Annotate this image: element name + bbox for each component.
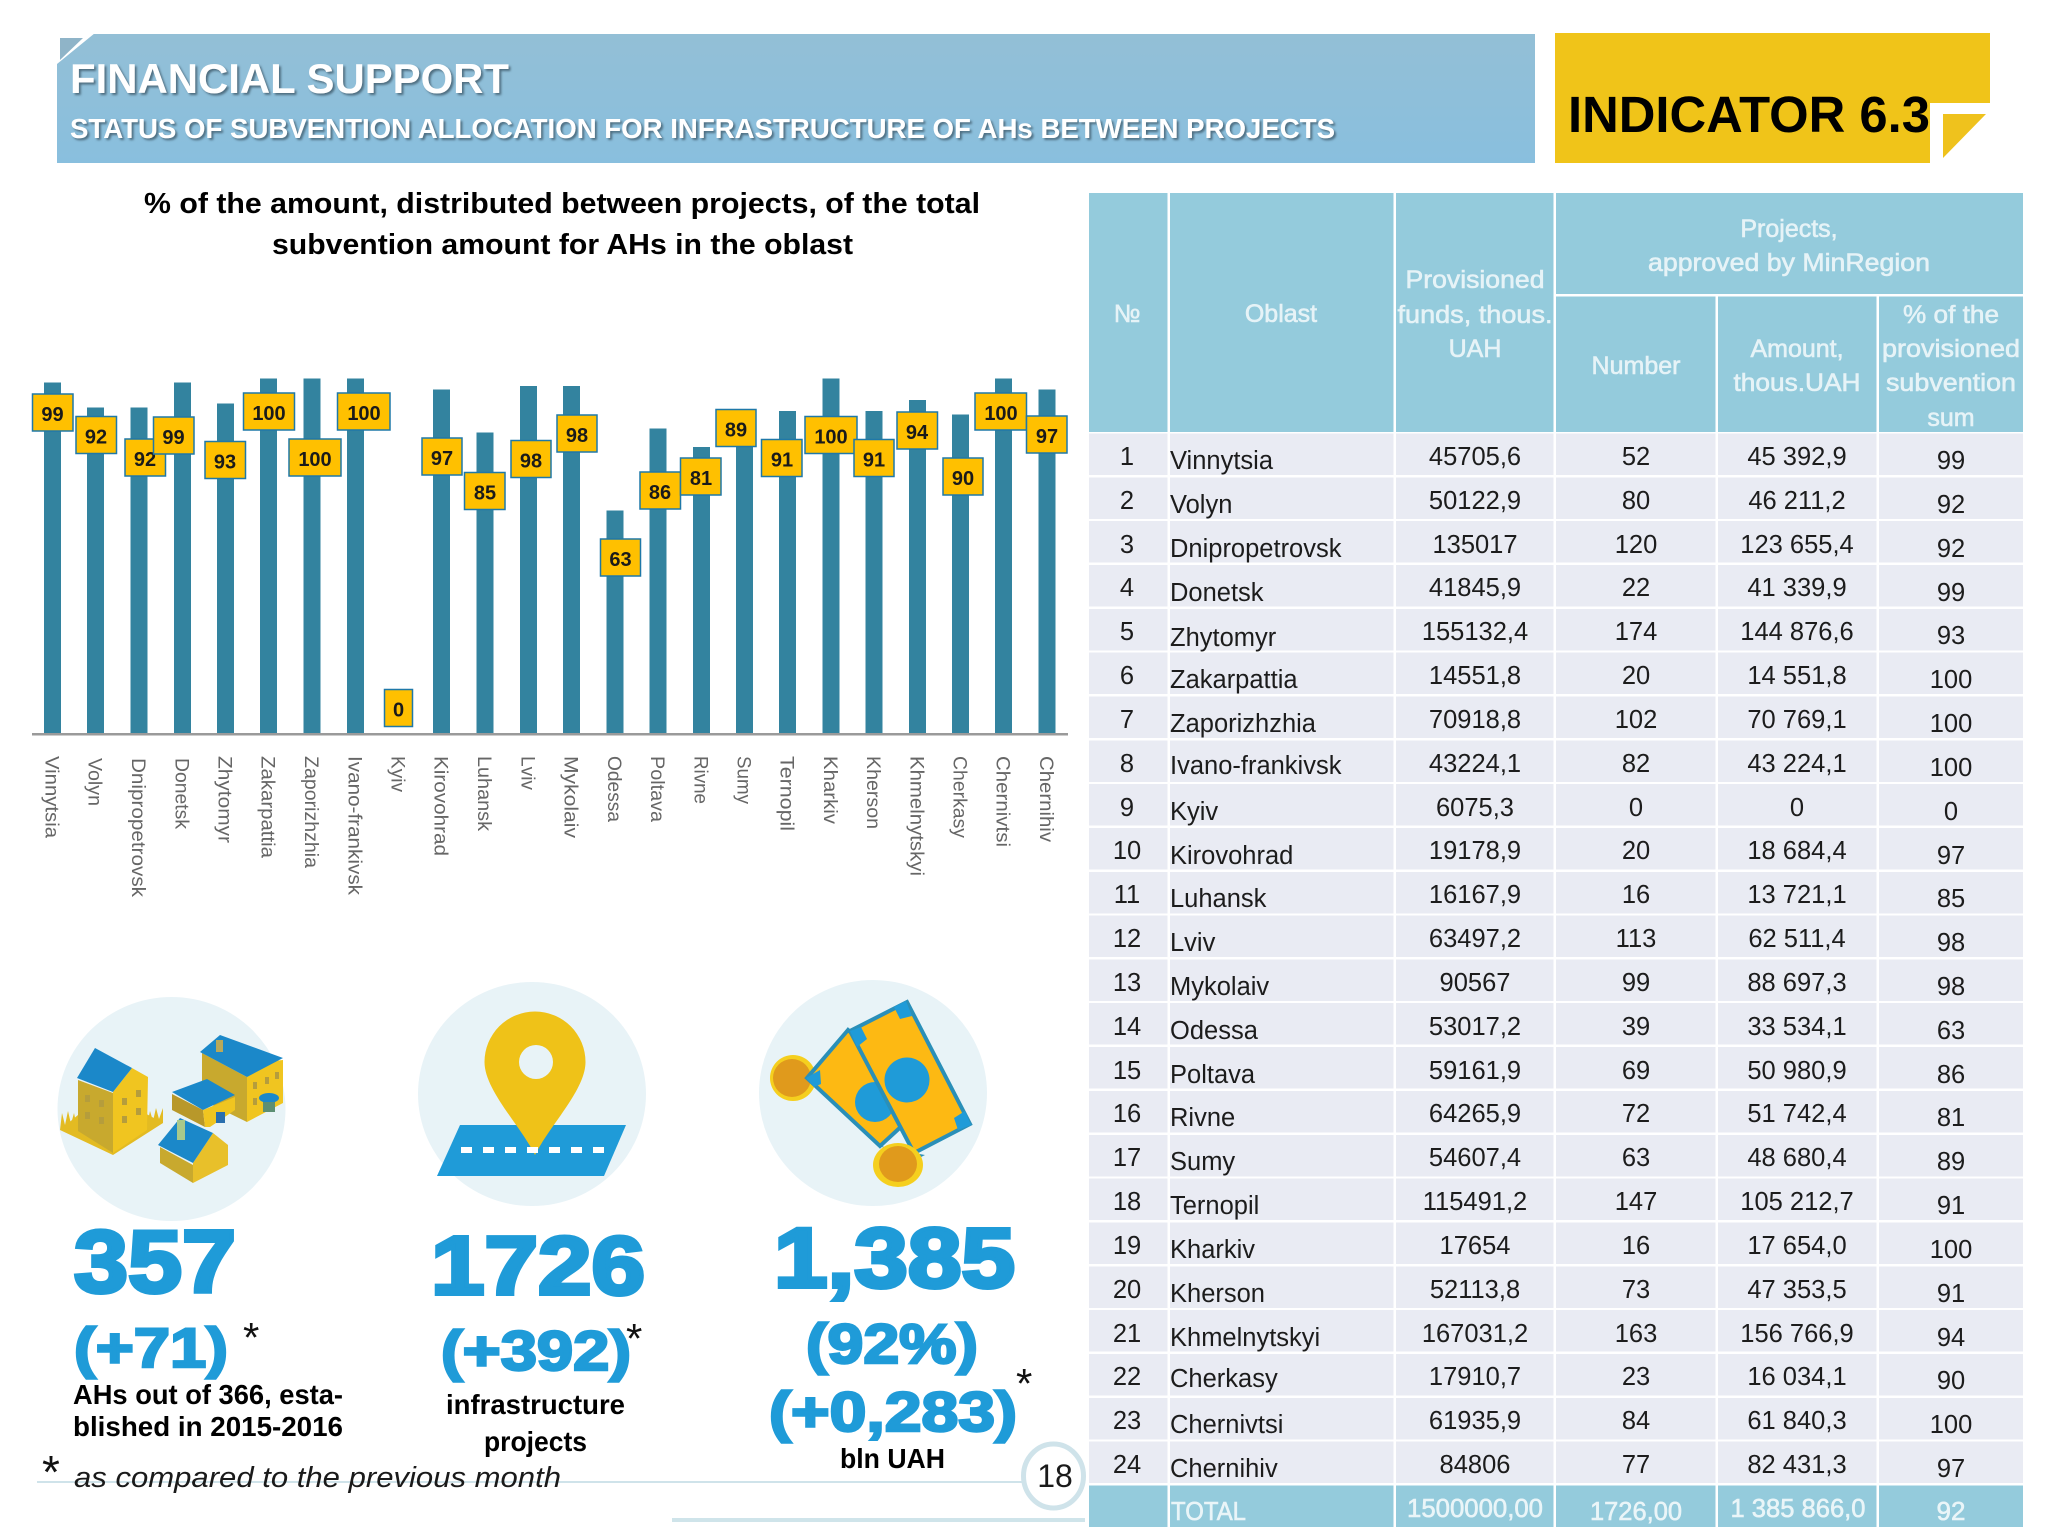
row 12: 62 511,4: [1748, 925, 1846, 953]
value labels: 89: [725, 420, 747, 442]
table header: Amount,: [1750, 335, 1844, 363]
row 16: [1113, 1100, 1965, 1132]
row 17: 48 680,4: [1747, 1144, 1847, 1172]
row 2: 50122,9: [1429, 487, 1521, 515]
row 4: Donetsk: [1170, 579, 1264, 607]
row 9: 6075,3: [1436, 794, 1514, 822]
row 10: 19178,9: [1429, 837, 1521, 865]
table header: Number: [1592, 352, 1680, 380]
oblast axis labels: Donetsk: [170, 758, 192, 830]
row 13: 99: [1622, 969, 1650, 997]
row 21: Khmelnytskyi: [1170, 1324, 1320, 1352]
value labels: 63: [609, 549, 632, 571]
table header: % of the: [1903, 301, 1999, 329]
stat: 1726 projects: *: [626, 1315, 642, 1362]
footnote: [42, 1446, 561, 1498]
column separators: [1168, 193, 2023, 1527]
oblast axis labels: Dnipropetrovsk: [127, 758, 148, 898]
value labels: 100: [298, 449, 332, 471]
row 20: Kherson: [1170, 1280, 1265, 1308]
row 10: 10: [1113, 837, 1141, 865]
row 22: [1113, 1363, 1965, 1395]
oblast axis labels: Chernihiv: [1035, 756, 1056, 843]
row 17: 89: [1937, 1148, 1965, 1176]
row 22: 16 034,1: [1747, 1363, 1847, 1391]
table total row: 92: [1937, 1496, 1965, 1526]
row 7: Zaporizhzhia: [1170, 710, 1317, 738]
row 6: 14 551,8: [1747, 662, 1847, 690]
stat: 357 AHs: AHs out of 366, esta-: [73, 1379, 343, 1410]
row 1: [1120, 443, 1965, 475]
table header: approved by MinRegion: [1648, 249, 1930, 277]
row 14: [1113, 1013, 1965, 1045]
value labels: 93: [214, 452, 236, 474]
lower footer rule: [672, 1518, 1085, 1522]
row 7: 102: [1615, 706, 1657, 734]
row 18: 115491,2: [1423, 1188, 1527, 1216]
row 5: [1120, 618, 1965, 652]
oblast axis labels: Sumy: [732, 756, 754, 804]
row 10: 18 684,4: [1747, 837, 1847, 865]
row 14: 63: [1937, 1017, 1965, 1045]
icon: banknotes and coins: [759, 980, 987, 1206]
value labels: 100: [984, 403, 1018, 425]
stat: 1,385 bln UAH: (92%): [806, 1312, 978, 1375]
oblast axis labels: Volyn: [84, 758, 104, 806]
value labels: 0: [393, 700, 404, 722]
row 5: Zhytomyr: [1170, 624, 1277, 652]
row 17: 54607,4: [1429, 1144, 1521, 1172]
row 10: 97: [1937, 842, 1965, 870]
table header: provisioned: [1882, 335, 2020, 363]
row 8: 82: [1622, 750, 1650, 778]
row 13: Mykolaiv: [1170, 973, 1269, 1001]
row 14: 33 534,1: [1747, 1013, 1847, 1041]
row 5: 5: [1120, 618, 1134, 646]
row 19: 100: [1930, 1236, 1972, 1264]
oblast axis labels: Poltava: [646, 756, 667, 822]
row 11: 85: [1937, 885, 1965, 913]
footnote: as compared to the previous month: [74, 1462, 561, 1494]
row 11: Luhansk: [1170, 885, 1267, 913]
row 20: 47 353,5: [1747, 1276, 1847, 1304]
row 15: 86: [1937, 1061, 1965, 1089]
heading: financial support: FINANCIAL SUPPORT: [70, 55, 509, 102]
stat: 357 AHs: (+71): [74, 1316, 228, 1379]
row 16: 72: [1622, 1100, 1650, 1128]
row 1: 1: [1120, 443, 1134, 471]
row 8: 100: [1930, 754, 1972, 782]
oblast axis labels: Kherson: [862, 756, 883, 829]
oblast axis labels: Vinnytsia: [40, 756, 62, 838]
table header: UAH: [1449, 335, 1501, 363]
value labels: 86: [649, 482, 671, 504]
row 11: 16167,9: [1429, 881, 1521, 909]
row 2: Volyn: [1170, 491, 1232, 519]
row 1: Vinnytsia: [1170, 447, 1274, 475]
oblast axis labels: Zhytomyr: [214, 756, 234, 844]
row 6: 6: [1120, 662, 1134, 690]
stat: 357 AHs: *: [243, 1314, 259, 1361]
oblast axis labels: Khmelnytskyi: [906, 756, 926, 876]
row 2: 46 211,2: [1748, 487, 1846, 515]
row 4: 41845,9: [1429, 574, 1521, 602]
stat: 357 AHs: blished in 2015-2016: [73, 1411, 343, 1442]
row 4: 22: [1622, 574, 1650, 602]
row 23: 61 840,3: [1747, 1407, 1847, 1435]
oblast axis labels: Zaporizhzhia: [300, 756, 321, 868]
row 1: 52: [1622, 443, 1650, 471]
table total row: [1089, 1486, 2023, 1527]
row 24: 84806: [1440, 1451, 1510, 1479]
row 24: 77: [1622, 1451, 1650, 1479]
row 6: 100: [1930, 666, 1972, 694]
row 1: 45 392,9: [1747, 443, 1847, 471]
row 6: Zakarpattia: [1170, 666, 1298, 694]
row 12: 12: [1113, 925, 1141, 953]
row 21: 94: [1937, 1324, 1965, 1352]
table header: sum: [1927, 404, 1975, 432]
stat: 1,385 bln UAH: (+0,283): [769, 1380, 1017, 1443]
row 17: [1113, 1144, 1965, 1176]
chart title: subvention amount for AHs in the oblast: [272, 229, 853, 261]
indicator badge: [1555, 33, 1990, 163]
row 11: 13 721,1: [1747, 881, 1847, 909]
value labels: 81: [690, 468, 712, 490]
row 23: 23: [1113, 1407, 1141, 1435]
value labels: 100: [814, 426, 848, 448]
table header: thous.UAH: [1734, 369, 1860, 397]
row 24: [1113, 1451, 1965, 1483]
oblast axis labels: Rivne: [690, 756, 710, 804]
value labels: 91: [771, 450, 793, 472]
row 3: 135017: [1432, 531, 1518, 559]
stat: 1726 projects: projects: [484, 1426, 587, 1457]
row 12: Lviv: [1170, 929, 1216, 957]
row 9: 9: [1120, 794, 1134, 822]
row 2: 80: [1622, 487, 1650, 515]
row 21: [1113, 1320, 1965, 1352]
row 3: 123 655,4: [1740, 531, 1854, 559]
row 4: 99: [1937, 579, 1965, 607]
row 9: 0: [1629, 794, 1643, 822]
stat: 1,385 bln UAH: [769, 1211, 1032, 1474]
row 22: Cherkasy: [1170, 1365, 1278, 1393]
row 10: Kirovohrad: [1170, 842, 1293, 870]
row 10: [1113, 837, 1965, 870]
axis line: [32, 733, 1068, 736]
table: [1089, 193, 2023, 1527]
bar chart: [32, 378, 1068, 898]
table total row: 1500000,00: [1407, 1493, 1543, 1523]
value labels: 99: [41, 404, 64, 426]
row 18: [1113, 1188, 1965, 1220]
page number: [1024, 1444, 1084, 1508]
row 2: 92: [1937, 491, 1965, 519]
row 19: 17654: [1440, 1232, 1510, 1260]
row 23: 100: [1930, 1411, 1972, 1439]
row 17: 17: [1113, 1144, 1141, 1172]
table header: №: [1114, 300, 1140, 328]
row 18: Ternopil: [1170, 1192, 1259, 1220]
value labels: 100: [347, 403, 381, 425]
oblast axis labels: Mykolaiv: [560, 756, 580, 839]
oblast axis labels: Zakarpattia: [256, 756, 278, 858]
table total row: 1 385 866,0: [1730, 1493, 1866, 1523]
row 20: 91: [1937, 1280, 1965, 1308]
footnote: *: [42, 1446, 60, 1498]
row 16: Rivne: [1170, 1104, 1235, 1132]
icon: houses: [58, 997, 286, 1221]
table header: Oblast: [1245, 300, 1317, 328]
row 9: Kyiv: [1170, 798, 1218, 826]
stat: 1726 projects: infrastructure: [446, 1389, 625, 1420]
value labels: 94: [906, 422, 929, 444]
row 22: 17910,7: [1429, 1363, 1521, 1391]
row 8: 43 224,1: [1747, 750, 1847, 778]
row 19: 17 654,0: [1747, 1232, 1847, 1260]
bars: [44, 378, 1056, 734]
row 6: 20: [1622, 662, 1650, 690]
row 3: 92: [1937, 535, 1965, 563]
table total row: TOTAL: [1171, 1496, 1246, 1526]
row 18: 105 212,7: [1740, 1188, 1854, 1216]
row 24: 24: [1113, 1451, 1141, 1479]
row 2: [1120, 487, 1965, 519]
value labels: 91: [863, 450, 885, 472]
oblast axis labels: Cherkasy: [948, 756, 970, 839]
row 16: 51 742,4: [1747, 1100, 1847, 1128]
row 5: 93: [1937, 622, 1965, 650]
value labels: 92: [85, 426, 107, 448]
table header: funds, thous.: [1398, 301, 1552, 329]
row 21: 167031,2: [1422, 1320, 1528, 1348]
row 14: Odessa: [1170, 1017, 1259, 1045]
row 22: 22: [1113, 1363, 1141, 1391]
row 12: 98: [1937, 929, 1965, 957]
row 19: 19: [1113, 1232, 1141, 1260]
value labels: 97: [431, 448, 453, 470]
row 16: 64265,9: [1429, 1100, 1521, 1128]
indicator badge: INDICATOR 6.3: [1568, 86, 1930, 143]
icon: location pin on road: [418, 982, 646, 1206]
row 13: 13: [1113, 969, 1141, 997]
row 13: 88 697,3: [1747, 969, 1847, 997]
row 22: 23: [1622, 1363, 1650, 1391]
value labels: 97: [1036, 426, 1058, 448]
stat: 1726 projects: (+392): [441, 1319, 631, 1382]
oblast axis labels: Chernivtsi: [992, 756, 1012, 847]
row 3: 120: [1615, 531, 1657, 559]
page number: 18: [1037, 1458, 1073, 1494]
row 23: [1113, 1407, 1972, 1439]
chart title: % of the amount, distributed between projects, of the total: [144, 188, 980, 220]
row 5: 144 876,6: [1740, 618, 1854, 646]
row 19: [1113, 1232, 1972, 1264]
row 18: 18: [1113, 1188, 1141, 1216]
value labels: 98: [520, 450, 542, 472]
value labels: 99: [162, 427, 185, 449]
row 23: 84: [1622, 1407, 1650, 1435]
row 6: 14551,8: [1429, 662, 1521, 690]
stat: 1726 projects: [431, 1219, 645, 1457]
stat: 1,385 bln UAH: *: [1016, 1360, 1032, 1407]
oblast axis labels: Kyiv: [386, 756, 408, 792]
row 8: Ivano-frankivsk: [1170, 752, 1342, 780]
row 21: 21: [1113, 1320, 1141, 1348]
row 18: 91: [1937, 1192, 1965, 1220]
table row backgrounds: [1089, 434, 2023, 1483]
table header: subvention: [1886, 369, 2016, 397]
row 14: 53017,2: [1429, 1013, 1521, 1041]
row 17: Sumy: [1170, 1148, 1235, 1176]
row 12: 63497,2: [1429, 925, 1521, 953]
row 3: Dnipropetrovsk: [1170, 535, 1342, 563]
stat: 357 AHs: [73, 1212, 343, 1442]
oblast axis labels: Ivano-frankivsk: [344, 756, 364, 896]
row 15: 59161,9: [1429, 1057, 1521, 1085]
row 9: 0: [1790, 794, 1804, 822]
row 16: 81: [1937, 1104, 1965, 1132]
row 24: 82 431,3: [1747, 1451, 1847, 1479]
stat: 1,385 bln UAH: bln UAH: [840, 1443, 945, 1474]
row 15: 50 980,9: [1747, 1057, 1847, 1085]
row 16: 16: [1113, 1100, 1141, 1128]
row 23: Chernivtsi: [1170, 1411, 1283, 1439]
row 22: 90: [1937, 1367, 1965, 1395]
value labels: 90: [952, 468, 974, 490]
oblast axis labels: Lviv: [516, 756, 538, 790]
row 20: 73: [1622, 1276, 1650, 1304]
oblast axis labels: Odessa: [603, 756, 624, 822]
row 5: 155132,4: [1422, 618, 1528, 646]
row 20: [1113, 1276, 1965, 1308]
row 6: [1120, 662, 1972, 694]
row 21: 156 766,9: [1740, 1320, 1854, 1348]
stat: 1726 projects: 1726: [431, 1219, 645, 1312]
header banner: [57, 33, 1535, 163]
row 20: 52113,8: [1430, 1276, 1520, 1304]
row 14: 39: [1622, 1013, 1650, 1041]
row 5: 174: [1615, 618, 1657, 646]
row 21: 163: [1615, 1320, 1657, 1348]
oblast axis labels: [40, 756, 1056, 898]
row 1: 99: [1937, 447, 1965, 475]
table total row: 1726,00: [1590, 1496, 1682, 1526]
subheading: status of subvention allocation: STATUS OF SUBVENTION ALLOCATION FOR INFRASTRUCTURE OF AHs BETWEEN PROJECTS: [70, 113, 1335, 144]
row 8: [1120, 750, 1972, 782]
row 13: [1113, 969, 1965, 1001]
value labels: [32, 393, 1067, 726]
row 11: [1114, 881, 1965, 913]
row 13: 98: [1937, 973, 1965, 1001]
row 7: [1120, 706, 1972, 738]
stat: 357 AHs: 357: [74, 1212, 236, 1311]
row 2: 2: [1120, 487, 1134, 515]
row 10: 20: [1622, 837, 1650, 865]
row 14: 14: [1113, 1013, 1141, 1041]
row 13: 90567: [1440, 969, 1510, 997]
table header: Projects,: [1740, 215, 1838, 243]
value labels: 98: [566, 425, 588, 447]
row 24: 97: [1937, 1455, 1965, 1483]
oblast axis labels: Kirovohrad: [430, 756, 450, 856]
row 7: 70 769,1: [1747, 706, 1847, 734]
chart title: [144, 188, 980, 261]
row 7: 100: [1930, 710, 1972, 738]
row 15: 69: [1622, 1057, 1650, 1085]
row 15: 15: [1113, 1057, 1141, 1085]
row 3: 3: [1120, 531, 1134, 559]
row 4: 4: [1120, 574, 1134, 602]
row 23: 61935,9: [1429, 1407, 1521, 1435]
row 19: 16: [1622, 1232, 1650, 1260]
table header: Provisioned: [1406, 266, 1544, 294]
row 9: [1120, 794, 1958, 826]
value labels: 100: [252, 403, 286, 425]
value labels: 85: [474, 482, 496, 504]
row 15: Poltava: [1170, 1061, 1256, 1089]
oblast axis labels: Ternopil: [776, 756, 796, 831]
row 11: 11: [1114, 881, 1140, 909]
row 19: Kharkiv: [1170, 1236, 1255, 1264]
oblast axis labels: Luhansk: [473, 756, 494, 832]
row 7: 7: [1120, 706, 1134, 734]
row 3: [1120, 531, 1965, 563]
row 4: [1120, 574, 1965, 607]
footer rule: [37, 1481, 1022, 1483]
row 12: 113: [1616, 925, 1656, 953]
oblast axis labels: Kharkiv: [819, 756, 840, 825]
row 8: 43224,1: [1429, 750, 1521, 778]
row 24: Chernihiv: [1170, 1455, 1278, 1483]
row 7: 70918,8: [1429, 706, 1521, 734]
row 1: 45705,6: [1429, 443, 1521, 471]
row 18: 147: [1615, 1188, 1657, 1216]
row 20: 20: [1113, 1276, 1141, 1304]
stat: 1,385 bln UAH: 1,385: [774, 1211, 1015, 1305]
table header: [1089, 193, 2023, 432]
row 4: 41 339,9: [1747, 574, 1847, 602]
row 17: 63: [1622, 1144, 1650, 1172]
row 15: [1113, 1057, 1965, 1089]
row 8: 8: [1120, 750, 1134, 778]
row 9: 0: [1944, 798, 1958, 826]
row 12: [1113, 925, 1965, 957]
value labels: 92: [134, 449, 156, 471]
row 11: 16: [1622, 881, 1650, 909]
